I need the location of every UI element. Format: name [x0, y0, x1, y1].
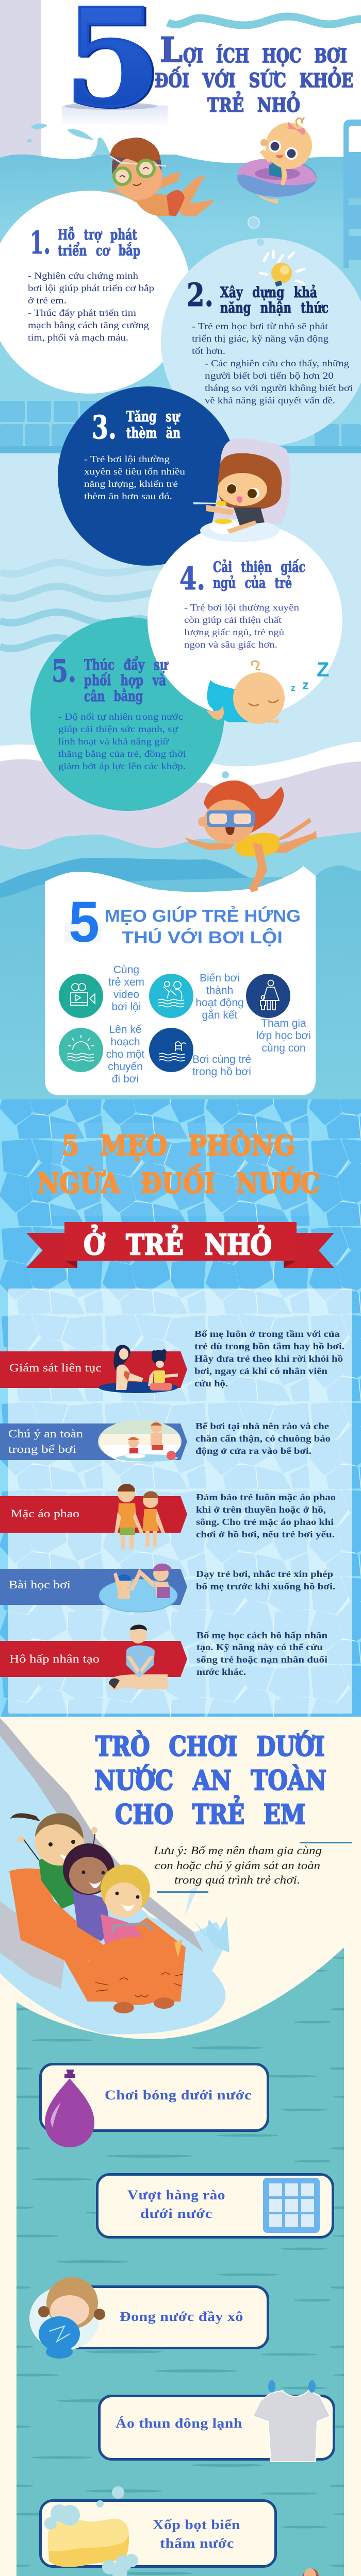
section: safe water games background [0, 1717, 361, 2576]
heading 2 [187, 276, 329, 316]
text: row 3 [196, 1492, 336, 1539]
icon: video camera [59, 974, 103, 1018]
section title [37, 1130, 320, 1199]
text: row 1: Hãy đưa trẻ theo khi rời khỏi hồ [194, 1353, 343, 1364]
pool tiles [0, 401, 361, 446]
tip label 1: video [113, 989, 139, 1001]
decorative waves [0, 563, 180, 649]
body text 3: năng lượng, khiến trẻ [84, 479, 178, 489]
heading 2: Xây dựng khả [220, 284, 317, 301]
heading 4: ngủ của trẻ [213, 574, 292, 591]
text: row 5 [196, 1630, 327, 1677]
tip label 3: cùng con [261, 1042, 306, 1054]
title: water games: CHO TRẺ EM [115, 1795, 305, 1831]
heading 3: thèm ăn [126, 425, 180, 442]
circle panel 3 [58, 386, 237, 566]
heading 5 [52, 653, 169, 705]
body text 1: - Thúc đẩy phát triển tim [28, 308, 136, 318]
game card 3 [29, 2277, 268, 2359]
text: row 3: Đảm bảo trẻ luôn mặc áo phao [196, 1492, 336, 1502]
snore letters: z [302, 677, 309, 692]
tip label 1 [108, 964, 144, 1013]
text: row 1: Bố mẹ luôn ở trong tầm với của [194, 1329, 340, 1339]
note text: Lưu ý: Bố mẹ nên tham gia cùng [153, 1844, 322, 1857]
body text 3: xuyên sẽ tiêu tốn nhiều [84, 466, 185, 477]
text: row 3: chơi ở hồ bơi, nếu trẻ bơi yếu. [196, 1529, 335, 1539]
note text: con hoặc chú ý giám sát an toàn [155, 1859, 320, 1872]
tip label 3: Tham gia [261, 1018, 306, 1029]
row: continuous supervision: Giám sát liên tục [9, 1361, 102, 1374]
tip label 1: trẻ xem [108, 976, 144, 988]
heading 3: Tăng sự [126, 408, 180, 425]
body text 2: - Trẻ em học bơi từ nhỏ sẽ phát [192, 321, 328, 331]
text: row 2: Bể bơi tại nhà nên rào và che [195, 1421, 329, 1431]
body text 1: tim, phổi và mạch máu. [28, 332, 128, 343]
body text 4: - Trẻ bơi lội thường xuyên [184, 602, 299, 613]
text: row 2: chắn cẩn thận, có chuông báo [195, 1433, 331, 1444]
heading 1: 1. [30, 225, 51, 261]
body text 5: linh hoạt và khả năng giữ [58, 736, 169, 747]
tip label 4: đi bơi [112, 1073, 139, 1085]
body text 4: lượng giấc ngủ, trẻ ngủ [184, 627, 284, 637]
game card 5 [40, 2486, 275, 2576]
tip label 3 [256, 1018, 311, 1054]
game card 2: dưới nước [140, 2206, 212, 2221]
illustration: baby in swim ring [237, 117, 317, 204]
icon: sun over waves [59, 1028, 103, 1072]
text: row 5: Bố mẹ học cách hô hấp nhân [196, 1630, 327, 1640]
water splash [27, 124, 111, 156]
tip label 5: trong hồ bơi [192, 1066, 251, 1078]
text: row 1 [194, 1329, 344, 1388]
cat head [88, 1937, 183, 2013]
top wave [168, 16, 361, 25]
row: life jackets [0, 1484, 187, 1549]
text: row 1: cứu hộ. [194, 1378, 228, 1388]
pool ladder [343, 120, 361, 268]
pool water [0, 155, 361, 453]
circle panel 2 [161, 238, 361, 446]
tip label 4: cho một [106, 1048, 145, 1060]
icon: parent and child in water [149, 974, 193, 1018]
illustration: waitress with cups [256, 2568, 326, 2576]
body text 2: - Các nghiên cứu cho thấy, những [205, 358, 349, 368]
icon: water balloon [45, 2070, 94, 2147]
medium water wave [0, 832, 361, 1099]
illustration: frozen shirt [253, 2380, 330, 2462]
body text 2 [192, 321, 353, 405]
circle panel 1 [0, 191, 191, 394]
illustration: fenced pool [98, 1420, 182, 1463]
tile edge strip [0, 446, 361, 453]
row: pool safety [0, 1420, 187, 1463]
text: row 4 [196, 1569, 335, 1591]
text: row 1: bơi, ngay cả khi có nhân viên [194, 1366, 327, 1376]
title: water games: NƯỚC AN TOÀN [94, 1765, 326, 1797]
body text 3: thèm ăn hơn sau đó. [84, 491, 172, 501]
row: pool safety: trong bể bơi [8, 1443, 76, 1455]
lower water [0, 866, 361, 1099]
body text 2: triển thị giác, kỹ năng vận động [192, 333, 329, 344]
text block panel 5 [52, 653, 186, 771]
tip label 2: gắn kết [202, 1009, 238, 1021]
tip label 4: Lên kế [109, 1024, 142, 1036]
panel: tips list [0, 1289, 352, 1714]
game card 3: Đong nước đầy xô [120, 2309, 243, 2324]
darker blue wave band [0, 858, 313, 1099]
text: row 1: trẻ dù trong bồn tắm hay hồ bơi. [194, 1341, 344, 1351]
row: life jackets: Mặc áo phao [11, 1507, 79, 1520]
heading 3 [92, 408, 180, 446]
body text 1: mạch bằng cách tăng cường [28, 320, 149, 330]
panel: 5 tips card [45, 866, 316, 1095]
heading 1: Hỗ trợ phát [58, 226, 137, 243]
icon: light bulb [260, 251, 304, 286]
heading 4: 4. [179, 561, 205, 597]
snore letters: Z [317, 658, 329, 681]
card heading: MẸO GIÚP TRẺ HỨNG [105, 906, 301, 925]
tip label 5: Bơi cùng trẻ [192, 1054, 251, 1065]
row: continuous supervision [0, 1345, 187, 1393]
illustration: swimming boy [107, 138, 214, 216]
body text 1: ở trẻ em. [28, 295, 67, 306]
tip label 4: hoạch [110, 1036, 140, 1048]
tip label 1: Cùng [113, 964, 139, 976]
game card 1: Chơi bóng dưới nước [105, 2088, 252, 2103]
illustration: girl with bucket [29, 2277, 105, 2359]
illustration: children in life jackets [114, 1484, 165, 1549]
snore letters: z [291, 683, 295, 693]
body text 5 [58, 711, 186, 771]
body text 4 [184, 602, 299, 650]
illustration: CPR [109, 1624, 168, 1690]
row: pool safety: Chú ý an toàn [8, 1427, 83, 1440]
row: CPR [0, 1624, 187, 1690]
rider 3 [101, 1865, 153, 1950]
slide rim [0, 1718, 204, 1953]
icon: grid fence [263, 2178, 320, 2233]
game card 6 [96, 2568, 331, 2576]
row: swimming lessons [0, 1564, 187, 1612]
row: CPR: Hô hấp nhân tạo [9, 1652, 100, 1665]
body text 1: - Nghiên cứu chứng minh [28, 270, 138, 281]
lower slide rim [0, 1901, 64, 1989]
body text 2: tháng so với người không biết bơi [205, 383, 353, 393]
illustration: swim lesson [99, 1564, 177, 1612]
text: row 3: khi ở trên thuyền hoặc ở hồ, [196, 1504, 326, 1515]
title: L [160, 30, 183, 70]
splash [195, 1917, 229, 1953]
heading 5: Thúc đẩy sự [84, 656, 169, 673]
heading 5: 5. [52, 653, 76, 689]
bubble [248, 217, 264, 246]
heading 1 [30, 225, 140, 261]
lavender wave [0, 759, 361, 855]
title: water games [94, 1731, 326, 1831]
tip label 4 [106, 1024, 145, 1085]
game card 2: Vượt hàng rào [127, 2188, 225, 2202]
circle panel 4 [147, 522, 342, 717]
hand of the swimmer [249, 881, 259, 892]
tip label 5 [192, 1054, 251, 1078]
body text 4: còn giúp cải thiện chất [184, 615, 282, 625]
rider 2 [63, 1843, 114, 1941]
heading 4 [179, 558, 305, 597]
text: row 2: động ở cửa ra vào bể bơi. [195, 1446, 311, 1456]
section title: 5 MẸO PHÒNG [62, 1130, 295, 1162]
text: row 4: bố mẹ trước khi xuống hồ bơi. [196, 1581, 335, 1591]
game card 5: thấm nước [160, 2536, 234, 2551]
game card 2 [97, 2174, 333, 2237]
heading 5: phối hợp và [84, 672, 166, 689]
body text 1: bơi lội giúp phát triển cơ bắp [28, 283, 154, 293]
tip label 1: bơi lội [112, 1001, 141, 1013]
rider 1 [10, 1813, 97, 1909]
ribbon: Ở TRẺ NHỎ [84, 1225, 272, 1261]
heading 2: 2. [187, 276, 214, 314]
illustration: girl swimmer with goggles [184, 781, 317, 890]
snore letters [291, 658, 329, 693]
text: row 5: tạo. Kỹ năng này có thể cứu [196, 1642, 323, 1652]
lavender side strip [0, 0, 41, 160]
card heading: THÚ VỚI BƠI LỘI [122, 927, 283, 947]
light pool floor [0, 453, 361, 773]
text: row 2 [195, 1421, 331, 1456]
tip label 2: Biến bơi [200, 972, 240, 984]
illustration: sleeping baby [206, 658, 329, 724]
body text 4: ngon và sâu giấc hơn. [184, 639, 277, 650]
circle panel 5 [30, 617, 224, 811]
tip label 4: chuyến [108, 1061, 143, 1073]
ribbon [26, 1222, 334, 1268]
slide water [0, 1736, 227, 2034]
note text: trong quá trình trẻ chơi. [174, 1873, 300, 1886]
white wave [0, 742, 361, 855]
icon: pool ladder [149, 1028, 193, 1072]
card heading [105, 906, 301, 947]
game card 1 [40, 2064, 268, 2147]
body text 3 [84, 454, 185, 501]
note text [153, 1842, 352, 1893]
tip label 2 [195, 972, 244, 1021]
heading 3: 3. [92, 409, 117, 446]
heading 4: Cải thiện giấc [213, 558, 305, 575]
illustration: mother and child [99, 1345, 178, 1393]
title [155, 30, 353, 116]
icon: small number 5: 5 [69, 890, 100, 954]
body text 3: - Trẻ bơi lội thường [84, 454, 170, 464]
section title: NGỪA ĐUỐI NƯỚC [37, 1164, 320, 1199]
text: row 3: sông. Cho trẻ mặc áo phao khi [196, 1517, 334, 1527]
body text 2: tốt hơn. [192, 346, 225, 356]
heading 2: năng nhận thức [220, 299, 329, 316]
body text 2: người biết bơi tiến bộ hơn 20 [205, 370, 334, 381]
game card 4 [99, 2380, 334, 2462]
illustration: water slide and kids [0, 1718, 229, 2034]
tip label 2: hoạt động [195, 997, 244, 1009]
text: row 4: Dạy trẻ bơi, nhắc trẻ xin phép [196, 1569, 333, 1579]
section: drowning prevention background [0, 1099, 361, 1717]
body text 1 [28, 270, 154, 343]
section: benefits of swimming background [0, 0, 361, 855]
heading 1: triển cơ bắp [58, 242, 140, 259]
thought bubble [222, 771, 229, 778]
tip label 3: lớp học bơi [256, 1030, 311, 1042]
title: TRẺ NHỎ [207, 92, 300, 116]
section: tips background [0, 832, 361, 1099]
game card 5: Xốp bọt biển [153, 2517, 240, 2532]
body text 5: thăng bằng của trẻ, đồng thời [58, 749, 186, 759]
icon: parent and child figures [246, 974, 290, 1018]
body text 5: giúp cải thiện sức mạnh, sự [58, 724, 178, 734]
game card 4: Áo thun đông lạnh [116, 2416, 242, 2431]
cat boat [9, 1869, 186, 2002]
illustration: girl eating [193, 438, 290, 542]
illustration: sponge with foam [44, 2486, 138, 2576]
text: row 5: nước khác. [196, 1667, 246, 1677]
text: row 5: sống trẻ hoặc nạn nhân đuối [196, 1654, 327, 1665]
tip label 2: thành [206, 985, 233, 996]
body text 2: về khả năng giải quyết vấn đề. [205, 395, 335, 405]
body text 5: giảm bớt áp lực lên các khớp. [58, 761, 186, 771]
row: swimming lessons: Bài học bơi [9, 1578, 71, 1591]
heading 5: cân bằng [84, 688, 143, 705]
body text 5: - Độ nổi tự nhiên trong nước [58, 711, 183, 722]
